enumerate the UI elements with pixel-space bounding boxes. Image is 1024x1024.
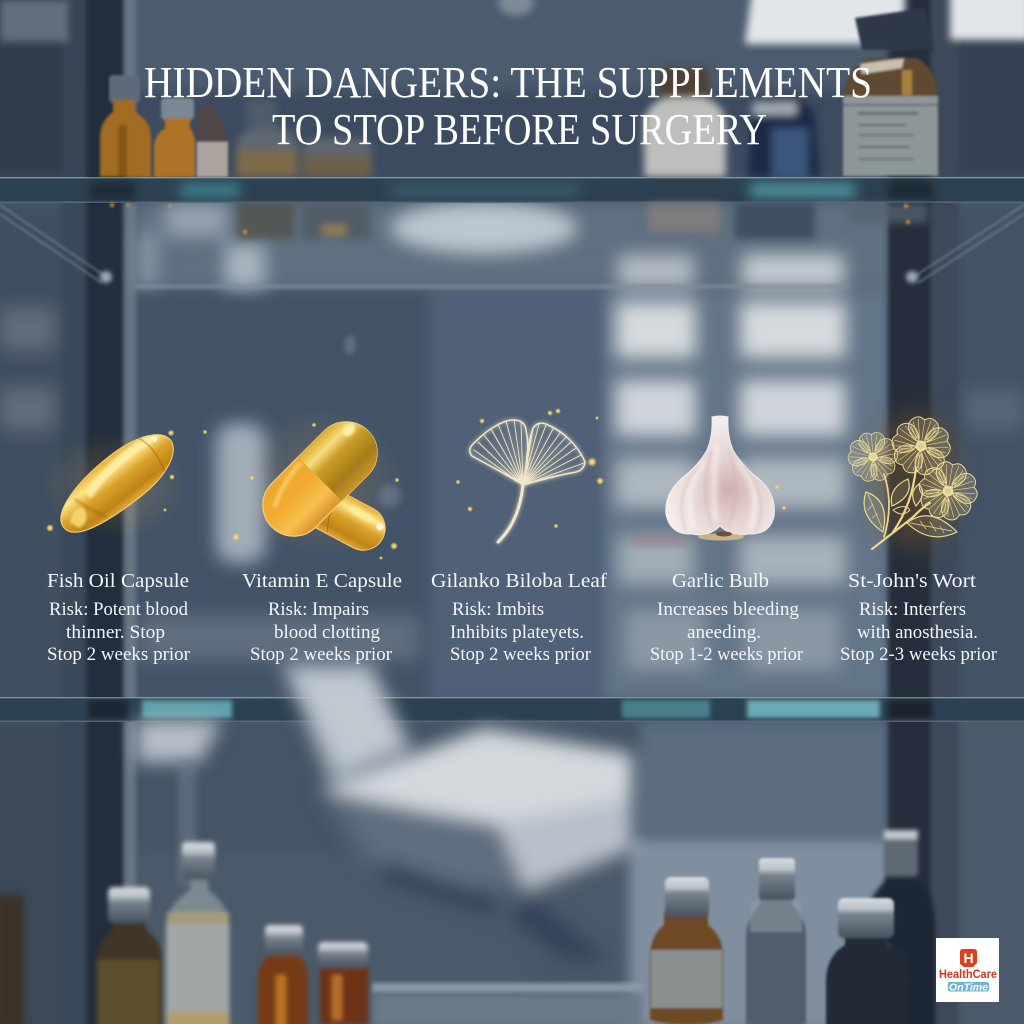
- logo: HealthCare OnTime: [936, 938, 999, 1002]
- title: [144, 58, 872, 154]
- risk text: Inhibits plateyets.: [450, 623, 584, 643]
- risk text: Increases bleeding: [657, 600, 799, 620]
- heading: Fish Oil Capsule: [47, 570, 189, 592]
- risk text: [250, 600, 392, 665]
- risk text: Risk: Interfers: [859, 600, 966, 620]
- risk text: Risk: Impairs: [268, 600, 369, 620]
- risk text: aneeding.: [687, 623, 761, 643]
- icon: vitamin E capsules: [232, 404, 407, 560]
- risk text: Risk: Potent blood: [49, 600, 189, 620]
- risk text: [840, 600, 997, 665]
- middle glass shelf: [0, 697, 1024, 722]
- risk text: [47, 600, 190, 665]
- icon: ginkgo leaf: [470, 420, 585, 542]
- risk text: blood clotting: [274, 623, 380, 643]
- risk text: Stop 2 weeks prior: [47, 645, 190, 665]
- risk text: [650, 600, 803, 665]
- column: Ginkgo Biloba Leaf: [431, 408, 607, 665]
- glass diagonal reflections: [0, 205, 1024, 283]
- golden sparkles around leaf: [456, 408, 604, 528]
- icon: St John's wort flowers: [844, 410, 984, 550]
- risk text: Stop 2 weeks prior: [250, 645, 392, 665]
- top glass shelf: [0, 177, 1024, 239]
- ceiling lamps: [745, 0, 1024, 44]
- bottles on top shelf: [100, 8, 938, 177]
- blurred exam bed: [137, 662, 642, 1024]
- heading: Garlic Bulb: [672, 570, 769, 592]
- icon: garlic bulb: [666, 416, 786, 540]
- heading: St-John's Wort: [848, 570, 976, 592]
- heading: Gilanko Biloba Leaf: [431, 570, 607, 592]
- column: Fish Oil Capsule: [42, 420, 208, 665]
- bottles on bottom shelf: [0, 830, 935, 1024]
- title: TO STOP BEFORE SURGERY: [272, 105, 767, 154]
- title: HIDDEN DANGERS: THE SUPPLEMENTS: [144, 58, 872, 107]
- column: Garlic Bulb: [650, 416, 803, 665]
- risk text: Stop 2 weeks prior: [450, 645, 591, 665]
- risk text: [450, 600, 591, 665]
- blurred boxes on background shelving: [0, 202, 1024, 670]
- faint shelf reflection of bottles: [237, 203, 928, 239]
- risk text: Risk: Imbits: [452, 600, 544, 620]
- risk text: with anosthesia.: [857, 623, 978, 643]
- risk text: thinner. Stop: [66, 623, 165, 643]
- risk text: Stop 2-3 weeks prior: [840, 645, 997, 665]
- risk text: Stop 1-2 weeks prior: [650, 645, 803, 665]
- shelf line at back: [135, 284, 850, 289]
- column: St John's Wort: [840, 410, 997, 665]
- icon: fish oil capsule: [42, 420, 208, 546]
- logo: HealthCare OnTime: HealthCare: [939, 969, 997, 981]
- heading: Vitamin E Capsule: [242, 570, 402, 592]
- logo: HealthCare OnTime: H: [963, 950, 974, 966]
- column: Vitamin E Capsule: [232, 404, 407, 665]
- logo: HealthCare OnTime: OnTime: [949, 982, 988, 994]
- faint red reflection: [632, 536, 687, 546]
